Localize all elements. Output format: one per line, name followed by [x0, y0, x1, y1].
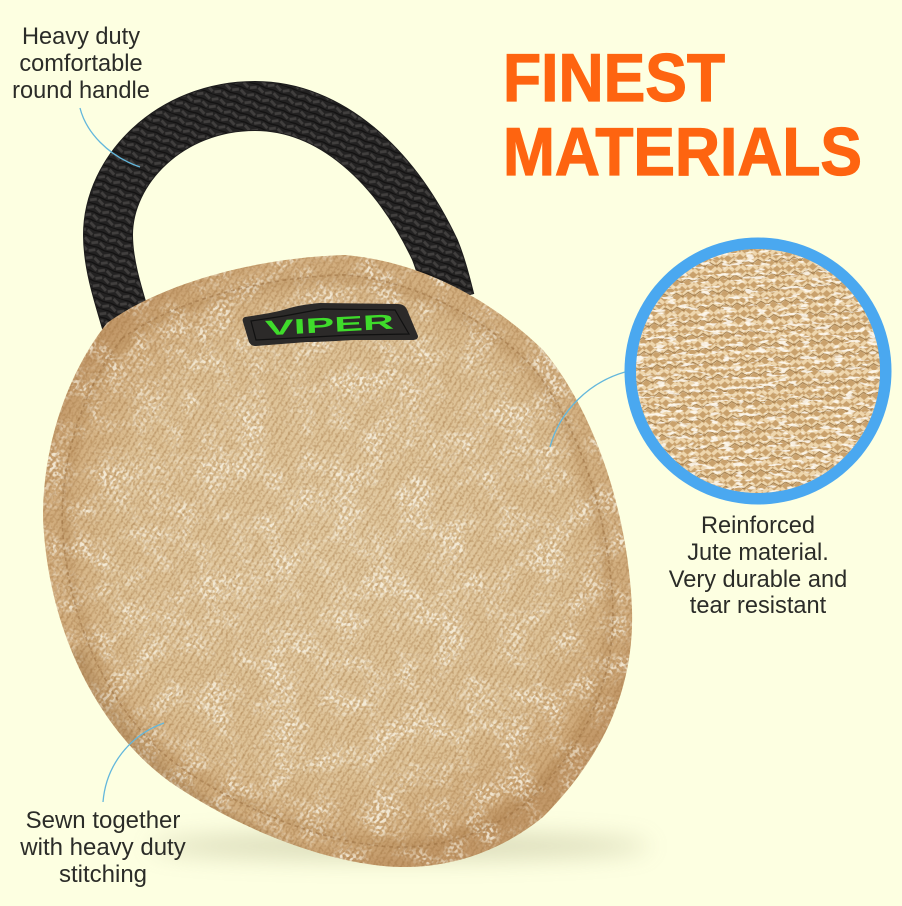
title: FINEST: [503, 40, 725, 116]
callout: handle: round handle: [12, 78, 150, 104]
callout: jute material: Jute material.: [687, 540, 829, 566]
callout: stitching: Sewn together: [26, 807, 180, 834]
callout: stitching: stitching: [59, 861, 147, 888]
title: MATERIALS: [503, 114, 862, 190]
brand patch: VIPER: VIPER: [265, 311, 395, 340]
callout: stitching: [19, 723, 186, 888]
callout: jute material: [550, 372, 847, 619]
brand patch: VIPER: [243, 303, 418, 346]
callout: jute material: Reinforced: [701, 513, 815, 539]
callout: jute material: tear resistant: [690, 593, 827, 619]
callout: handle: Heavy duty: [22, 24, 140, 50]
jute bite pad: [30, 245, 640, 875]
ground shadow: [150, 833, 650, 859]
material swatch circle: [624, 238, 892, 504]
callout: handle: [12, 24, 150, 167]
callout: handle: comfortable: [19, 51, 143, 77]
handle: black rope: [108, 106, 450, 335]
callout: jute material: Very durable and: [669, 567, 847, 593]
title: [503, 40, 862, 190]
callout: stitching: with heavy duty: [19, 834, 186, 861]
